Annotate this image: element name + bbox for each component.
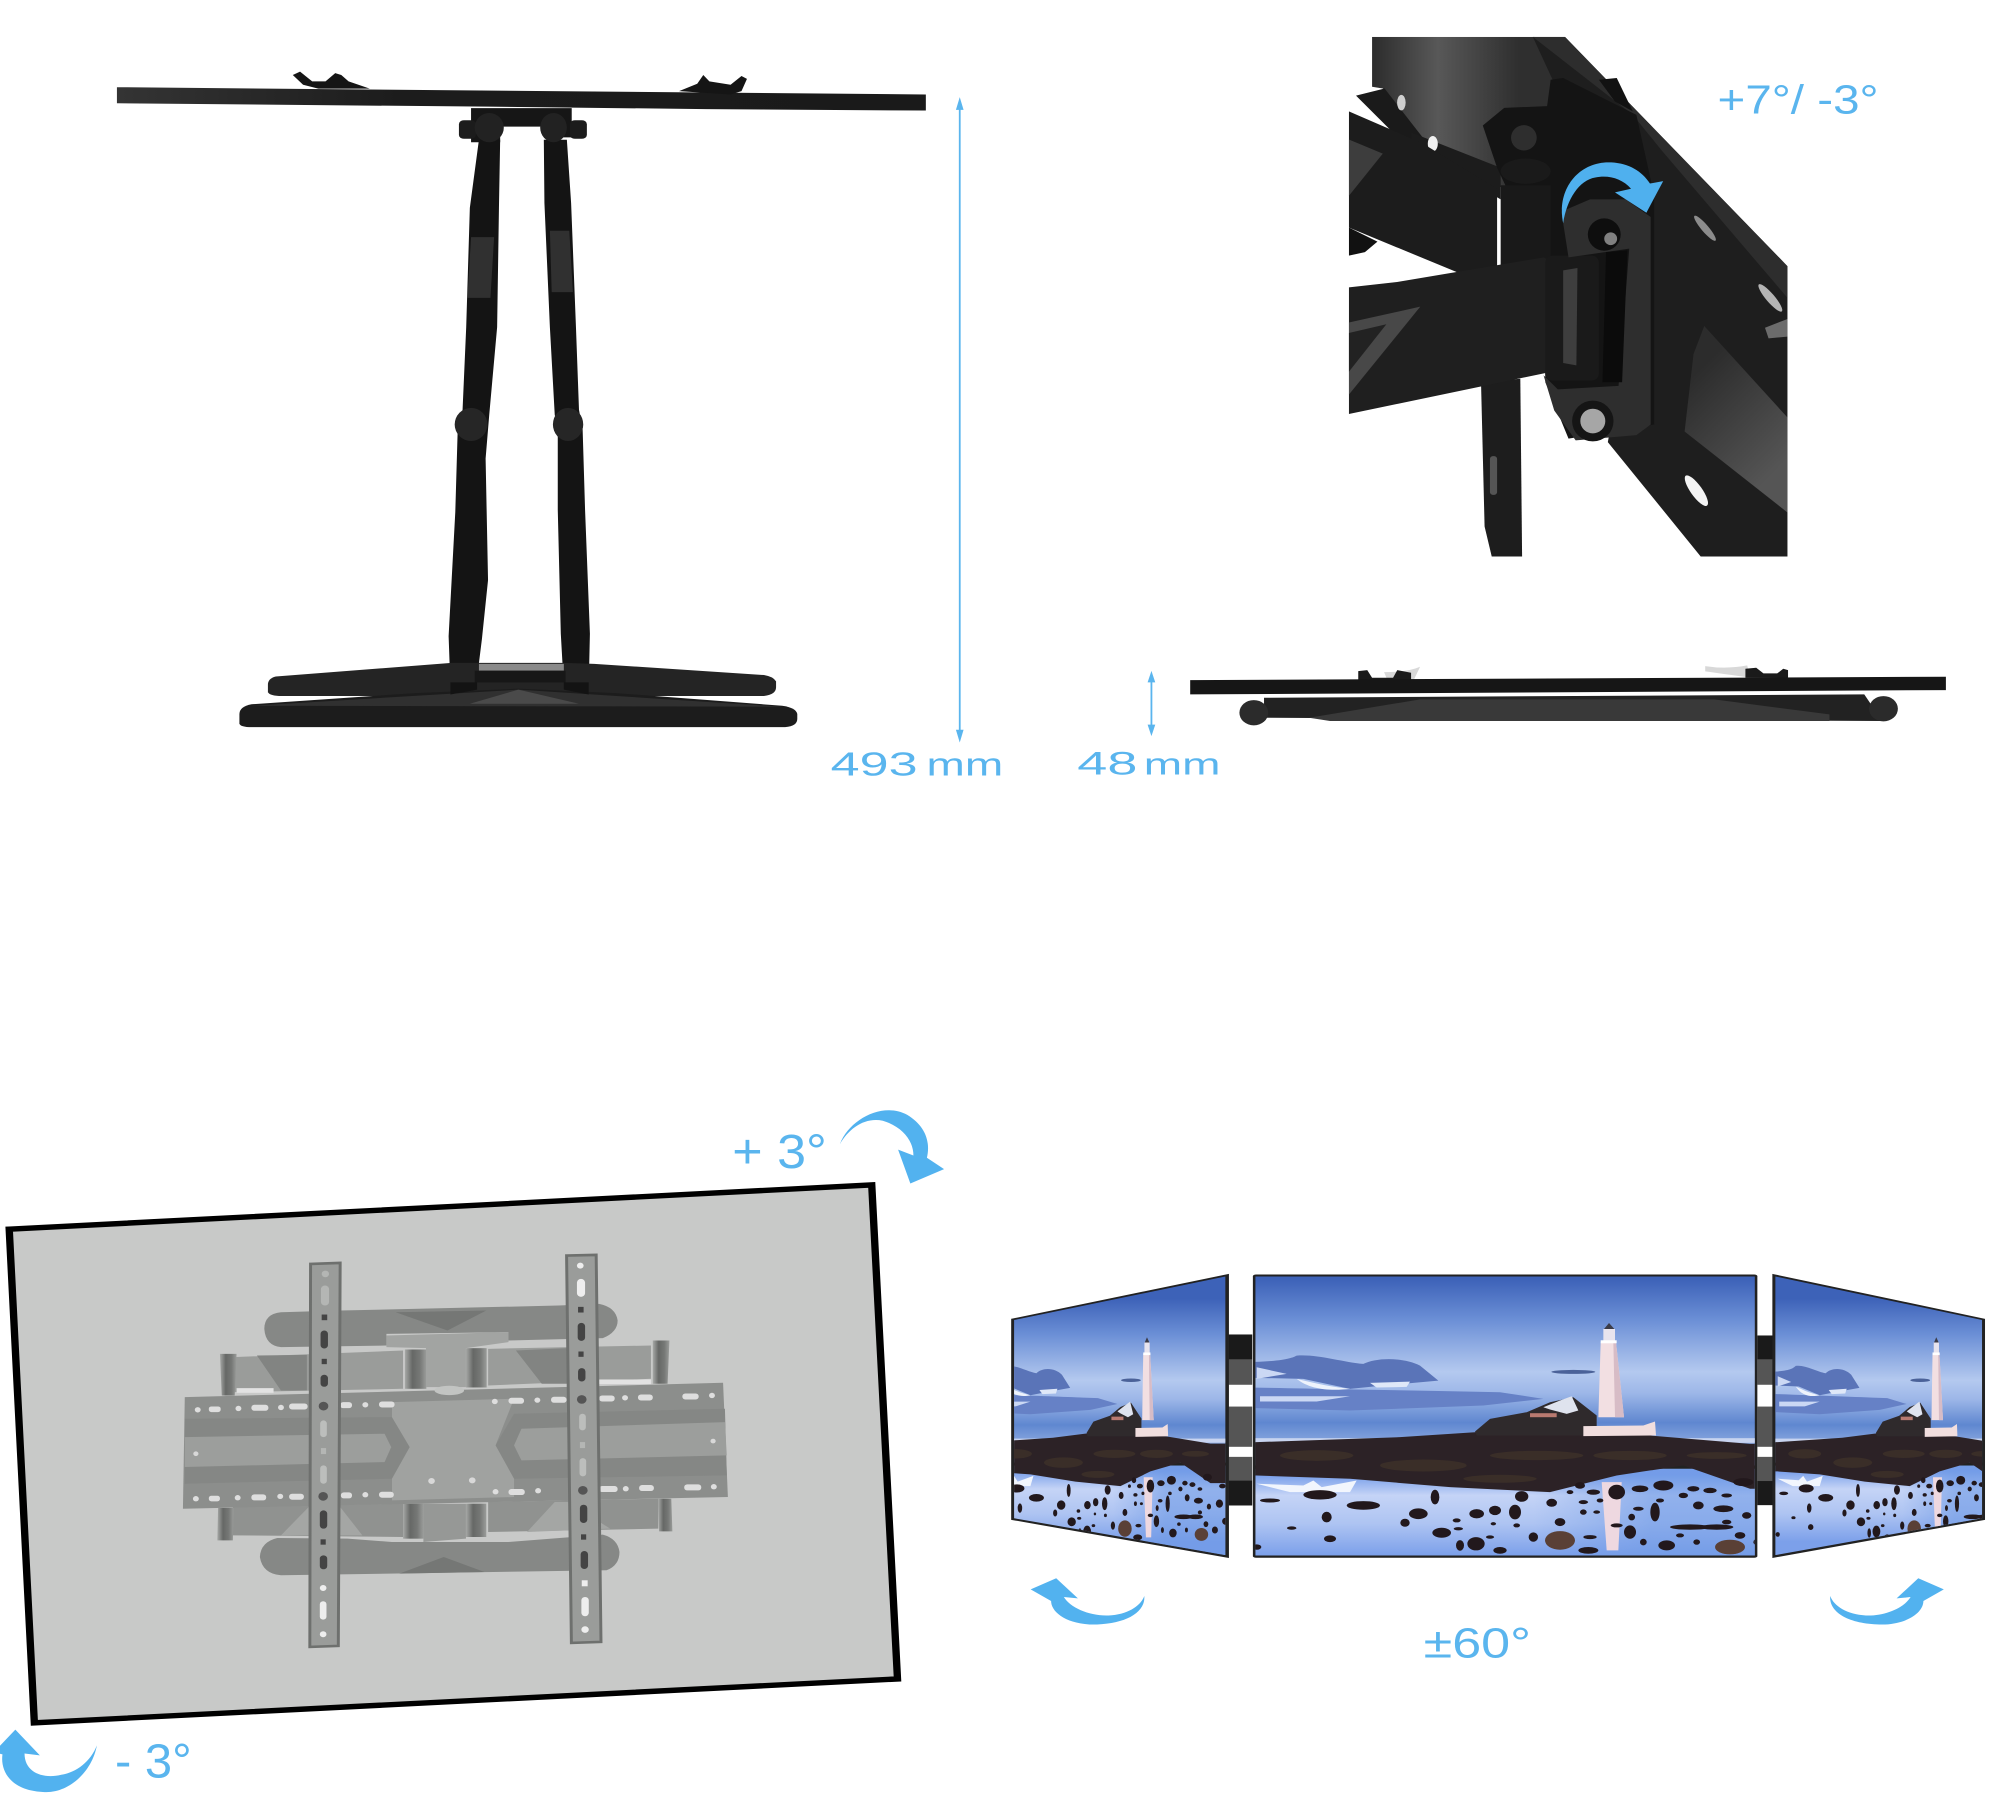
left light clamp wing <box>1384 667 1420 679</box>
upper left tube <box>220 1354 237 1395</box>
upper left arm <box>233 1350 403 1392</box>
nut <box>1588 218 1621 251</box>
front bracket <box>1544 199 1651 440</box>
bottom rotation arrow <box>0 1730 97 1792</box>
threaded stud <box>1765 319 1787 338</box>
rail tab <box>1599 78 1633 111</box>
label: -3°: - 3° <box>115 1735 192 1789</box>
upper left white strip <box>237 1388 274 1393</box>
base top surface <box>252 690 782 707</box>
right light clamp wing <box>1705 665 1750 678</box>
panel: folded mount with 48 mm thickness <box>1077 665 1946 781</box>
upper left cylinder <box>405 1350 426 1389</box>
lower left tube <box>217 1508 234 1540</box>
right clamp <box>679 75 747 95</box>
lower base grille <box>399 1557 484 1574</box>
upper arm stamp <box>1349 140 1383 196</box>
top speckled bolt <box>1511 125 1537 150</box>
left swivel arrow <box>1031 1578 1144 1625</box>
lower left stamp <box>281 1507 362 1535</box>
hub bracket <box>471 108 572 142</box>
label: +7°/ -3°: +7°/ -3° <box>1718 77 1879 123</box>
base left arm foot <box>450 682 477 695</box>
upper base <box>264 1304 618 1347</box>
centre screen picture <box>750 1113 2000 1635</box>
plate hole <box>1397 95 1406 110</box>
panel: side view of the mount with 493 mm depth <box>117 72 1003 784</box>
small left plate <box>1356 88 1422 138</box>
folded mount drawing <box>1190 665 1946 725</box>
lower arm stamp <box>1349 307 1420 395</box>
nut centre <box>1604 232 1617 245</box>
left clamp <box>293 72 370 89</box>
pivot cap <box>435 1386 464 1395</box>
beam top slots <box>195 1393 715 1412</box>
right channel inner <box>514 1422 727 1460</box>
left mount pieces <box>1229 1334 1252 1505</box>
beam holes <box>193 1439 716 1484</box>
middle rail slot <box>1758 284 1782 312</box>
left vertical rail <box>310 1263 340 1647</box>
right top knob <box>540 113 567 142</box>
beam top strip <box>1533 37 1787 298</box>
depth arrow <box>956 97 964 742</box>
bracket slot <box>1602 250 1627 382</box>
lower right stamp <box>527 1502 610 1532</box>
base right arm foot <box>564 682 589 695</box>
thickness arrow <box>1148 671 1155 736</box>
left upper sleeve <box>467 237 494 298</box>
side view mount drawing <box>117 72 926 727</box>
upper base grille <box>396 1311 486 1331</box>
right clamp <box>1745 668 1788 678</box>
plate bar <box>1190 677 1946 694</box>
left screen <box>1011 1274 1229 1558</box>
left top knob <box>475 113 504 142</box>
right upper sleeve <box>550 231 573 292</box>
right arm <box>544 140 590 687</box>
left arm <box>449 140 500 687</box>
left joint knob <box>455 408 487 441</box>
upper right stamp <box>516 1348 568 1384</box>
blue tilt arrow <box>1562 162 1663 223</box>
upper rail slot <box>1694 216 1716 241</box>
label: 493 mm <box>831 747 1003 784</box>
upper pivot cylinder <box>1500 185 1540 265</box>
left channel inner <box>185 1434 391 1467</box>
right channel <box>496 1409 727 1479</box>
left knob <box>1239 700 1268 725</box>
upper right cylinder <box>466 1348 487 1387</box>
arm top filler <box>1420 136 1501 200</box>
lower right tube <box>658 1499 672 1531</box>
left clamp <box>1358 670 1411 680</box>
base grille <box>470 690 579 704</box>
lower arm <box>1348 264 1546 414</box>
main beam <box>183 1383 728 1509</box>
label: 48 mm: 48 <box>1077 745 1137 781</box>
centre screen <box>750 1113 2000 1635</box>
rear base <box>268 663 776 696</box>
lower slot <box>1684 475 1708 506</box>
inner stamp <box>1349 324 1386 372</box>
TV plate bar <box>117 87 926 111</box>
rail slot <box>1490 456 1497 495</box>
panel: screen rotation ±3° <box>0 1110 944 1792</box>
screen frame <box>9 1185 897 1723</box>
upper pivot cap <box>1501 159 1551 184</box>
upper right white strip <box>597 1379 651 1384</box>
left dark wedge <box>1349 228 1377 256</box>
base cross strip <box>479 664 564 671</box>
beam dark edge <box>1533 37 1787 556</box>
centre column <box>386 1332 508 1387</box>
label: 493 mm: mm <box>927 747 1003 783</box>
label: ±60°: ±60° <box>1424 1619 1531 1666</box>
lower left arm <box>233 1504 403 1537</box>
left channel <box>185 1417 410 1484</box>
lower base <box>260 1535 619 1575</box>
upper right tube <box>653 1341 669 1384</box>
right knob <box>1869 696 1898 721</box>
mount seen through screen <box>183 1255 728 1647</box>
panel: tilt close-up photo <box>1349 37 1879 556</box>
label: +3°: + 3° <box>732 1125 827 1179</box>
silver bolt surround <box>1572 401 1614 441</box>
lower centre <box>423 1504 466 1542</box>
base <box>1309 699 1829 721</box>
upper left stamp <box>257 1355 307 1390</box>
right screen picture <box>1550 1152 2000 1612</box>
base cross bar <box>475 671 566 682</box>
lower right cylinder <box>466 1504 486 1537</box>
left rail holes <box>318 1271 329 1637</box>
folded arm <box>1264 694 1882 721</box>
weld strip <box>1563 268 1577 365</box>
label: 493 mm: 493 <box>831 747 918 784</box>
panel: swivel ±60° with three screens <box>1011 1274 1985 1658</box>
top rotation arrow <box>840 1110 944 1184</box>
lower left cylinder <box>403 1504 423 1539</box>
three screens drawing <box>1011 1274 1985 1624</box>
silver bolt <box>1580 409 1605 433</box>
right screen <box>1550 1152 2000 1612</box>
right vertical rail <box>567 1255 601 1643</box>
upper arm <box>1349 111 1497 273</box>
lower grey recess <box>1685 326 1787 512</box>
label: 48 mm <box>1077 745 1220 781</box>
right mount pieces <box>1757 1335 1774 1505</box>
slotted vertical rail <box>1481 379 1522 556</box>
front base <box>239 689 797 727</box>
beam bottom slots <box>193 1484 717 1501</box>
right joint knob <box>553 408 583 441</box>
rear bracket plate <box>1483 78 1654 439</box>
centre plate <box>392 1399 514 1500</box>
left screen picture <box>1014 1276 1226 1556</box>
right side bolt <box>570 120 587 139</box>
front cylinder <box>1545 373 1546 375</box>
lower right arm <box>488 1499 658 1532</box>
right swivel arrow <box>1830 1578 1944 1625</box>
left side bolt <box>459 120 476 139</box>
grey beam face <box>1372 36 1552 187</box>
tilt close-up drawing <box>1349 37 1787 556</box>
right rail holes <box>577 1263 589 1633</box>
label: 48 mm: mm <box>1144 747 1220 781</box>
tilted screen frame <box>0 1110 944 1792</box>
upper right arm <box>488 1346 651 1385</box>
plate hole 2 <box>1428 136 1438 152</box>
